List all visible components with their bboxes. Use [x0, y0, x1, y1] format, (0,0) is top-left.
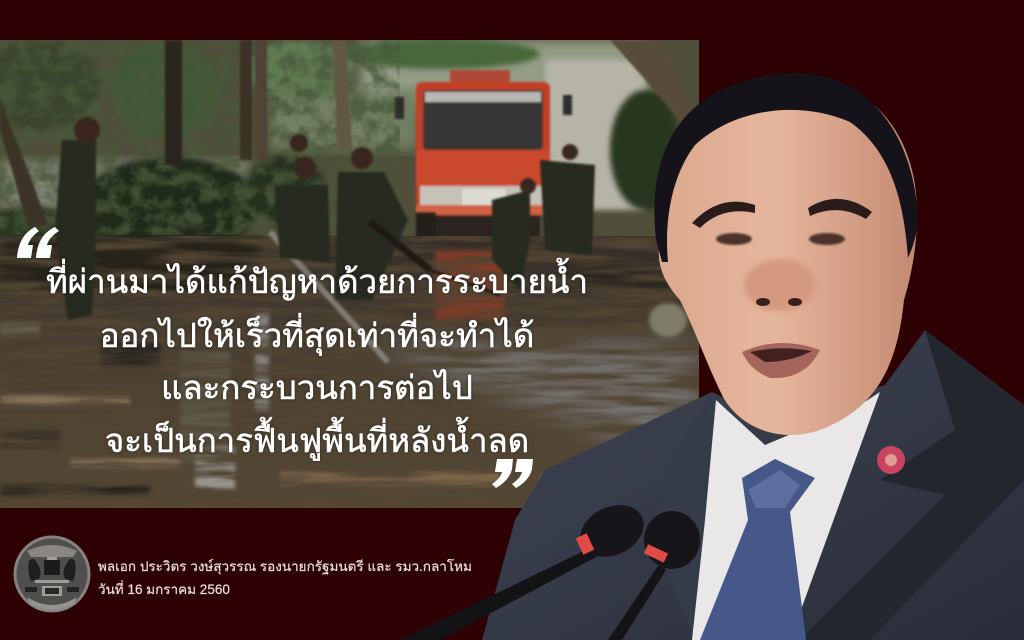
- hair: [654, 73, 918, 262]
- darkening overlay: [0, 40, 699, 508]
- caption line 1: พลเอก ประวิตร วงษ์สุวรรณ รองนายกรัฐมนตรี และ รมว.กลาโหม: [98, 559, 472, 574]
- backdrop: [360, 40, 650, 110]
- shirt and tie: [692, 392, 880, 640]
- pin: [877, 446, 905, 474]
- ground: [0, 236, 699, 478]
- quote line 1: ที่ผ่านมาได้แก้ปัญหาด้วยการระบายน้ำ: [46, 263, 588, 300]
- opening quotation mark: [17, 227, 59, 258]
- eyes: [716, 233, 845, 245]
- eyebrows: [692, 202, 755, 228]
- icon: government seal: [14, 536, 90, 612]
- quote line 3: และกระบวนการต่อไป: [161, 369, 473, 406]
- nose: [744, 259, 816, 311]
- soldiers: [55, 117, 595, 320]
- quote text: [17, 227, 588, 488]
- closing quotation mark: [492, 459, 533, 488]
- quote line 2: ออกไปให้เร็วที่สุดเท่าที่จะทำได้: [100, 317, 534, 354]
- head and face: [659, 76, 917, 435]
- scene: photo of soldiers and fire truck: [0, 40, 699, 508]
- suit: [482, 330, 1024, 640]
- microphones: [400, 548, 598, 640]
- quote line 4: จะเป็นการฟื้นฟูพื้นที่หลังน้ำลด: [105, 422, 529, 459]
- mouth: [742, 343, 820, 378]
- fire truck: [395, 70, 572, 244]
- caption line 2: วันที่ 16 มกราคม 2560: [98, 582, 230, 597]
- caption: [98, 558, 472, 597]
